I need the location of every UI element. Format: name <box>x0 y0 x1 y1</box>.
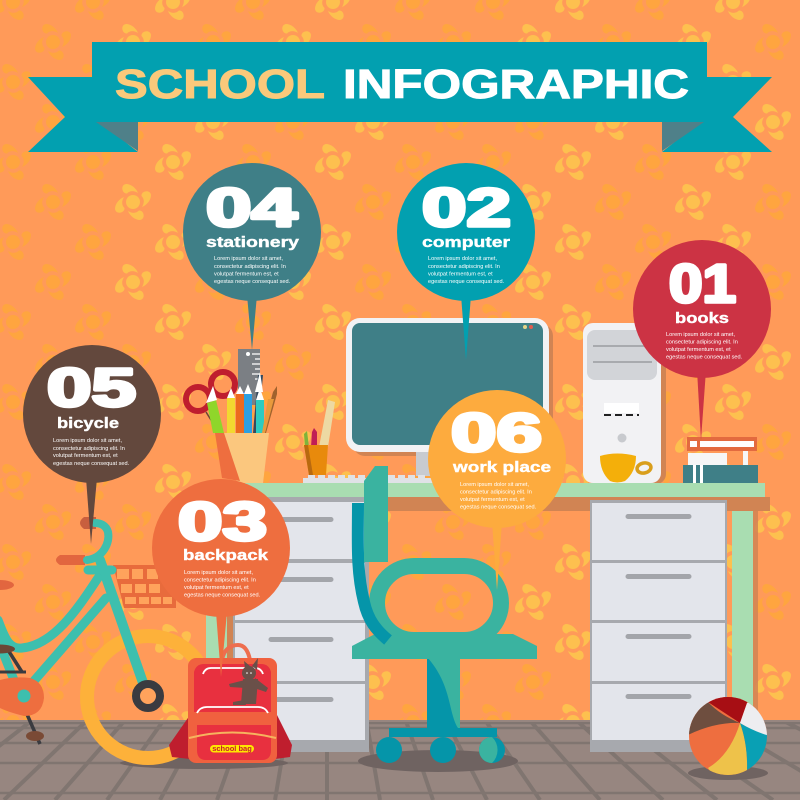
bicycle hub <box>136 684 160 708</box>
bubble 03 backpack: backpack <box>183 547 269 564</box>
bubble 01 books: books <box>675 310 729 327</box>
bubble 03 backpack <box>152 433 290 677</box>
bubble 01 books: 01 <box>669 254 736 314</box>
bubble 06 work place: Lorem ipsum dolor sit amet, <box>460 482 529 488</box>
bubble 04 stationery: stationery <box>206 234 300 251</box>
floor shadows <box>120 750 768 780</box>
desk <box>206 483 770 722</box>
title text <box>115 61 689 107</box>
title text: SCHOOL <box>115 61 325 107</box>
bubble 06 work place: egestas neque consequat sed. <box>460 504 537 510</box>
bubble 06 work place: consectetur adipiscing elit. In <box>460 490 532 496</box>
right drawer cabinet <box>590 500 727 752</box>
bubble 02 computer: Lorem ipsum dolor sit amet, <box>428 256 497 262</box>
bubble 01 books <box>633 240 771 440</box>
bubble 05 bicycle: egestas neque consequat sed. <box>53 461 130 467</box>
computer tower <box>583 323 666 484</box>
bubble 04 stationery: egestas neque consequat sed. <box>214 279 291 285</box>
bicycle kickstand and saddle <box>0 644 44 744</box>
bubble 06 work place <box>428 390 566 590</box>
chair backrest loop <box>377 566 501 640</box>
bubble 02 computer: 02 <box>422 178 511 238</box>
chair arm <box>358 503 388 640</box>
backpack <box>169 645 292 763</box>
bubble 02 computer: computer <box>422 234 510 251</box>
icon: coffee cup <box>600 454 652 482</box>
beach ball <box>689 697 767 775</box>
bubble 01 books: volutpat fermentum est, et <box>666 347 731 353</box>
ribbon left tail <box>28 77 138 152</box>
bubble 05 bicycle: bicycle <box>57 415 119 432</box>
bubble 02 computer: consectetur adipiscing elit. In <box>428 264 500 270</box>
scissors <box>186 372 235 428</box>
floor <box>0 720 800 800</box>
bubble 03 backpack: Lorem ipsum dolor sit amet, <box>184 570 253 576</box>
bubble 05 bicycle: consectetur adipiscing elit. In <box>53 446 125 452</box>
bubble 04 stationery: consectetur adipiscing elit. In <box>214 264 286 270</box>
chair seat <box>352 634 537 659</box>
bicycle frame <box>0 523 148 700</box>
bubble 06 work place: work place <box>452 459 551 476</box>
bubble 03 backpack: volutpat fermentum est, et <box>184 585 249 591</box>
bubble 04 stationery: volutpat fermentum est, et <box>214 272 279 278</box>
bubble 01 books: consectetur adipiscing elit. In <box>666 340 738 346</box>
ribbon right fold <box>662 122 704 151</box>
small orange cup with pens <box>304 400 335 475</box>
bubble 03 backpack: egestas neque consequat sed. <box>184 592 261 598</box>
chair base and wheels <box>376 655 505 763</box>
bicycle handlebar grips <box>0 517 96 590</box>
peach cup <box>224 433 269 483</box>
monitor <box>346 318 553 476</box>
ribbon left fold <box>96 122 138 151</box>
ribbon right tail <box>662 77 772 152</box>
pencil holder with stationery <box>186 349 277 483</box>
teddy toy <box>229 658 268 705</box>
ribbon body <box>92 42 707 122</box>
bicycle wheel <box>87 636 209 758</box>
bubble 02 computer: egestas neque consequat sed. <box>428 279 505 285</box>
bubble 04 stationery: 04 <box>206 178 297 238</box>
ruler <box>238 349 260 405</box>
backpack body <box>188 658 277 763</box>
bubble 01 books: egestas neque consequat sed. <box>666 354 743 360</box>
bubble 05 bicycle: Lorem ipsum dolor sit amet, <box>53 438 122 444</box>
left drawer cabinet <box>233 497 369 752</box>
bubble 05 bicycle <box>23 345 161 544</box>
pencils <box>206 372 277 433</box>
bicycle basket <box>113 565 176 608</box>
bicycle <box>0 517 209 758</box>
title banner <box>28 42 772 152</box>
office chair <box>352 466 537 763</box>
bubble 03 backpack: 03 <box>178 492 267 552</box>
bubble 02 computer: volutpat fermentum est, et <box>428 272 493 278</box>
stack of books <box>683 437 758 483</box>
bubble 02 computer <box>397 163 535 360</box>
backpack label: school bag <box>212 744 252 753</box>
bubble 05 bicycle: volutpat fermentum est, et <box>53 453 118 459</box>
bubble 06 work place: volutpat fermentum est, et <box>460 497 525 503</box>
bicycle chain guard <box>0 677 44 716</box>
backpack straps <box>169 715 292 759</box>
bubble 01 books: Lorem ipsum dolor sit amet, <box>666 332 735 338</box>
bubble 03 backpack: consectetur adipiscing elit. In <box>184 578 256 584</box>
bubble 06 work place: 06 <box>451 403 542 463</box>
bubble 05 bicycle: 05 <box>47 358 136 418</box>
backpack handle <box>222 645 250 660</box>
keyboard <box>303 475 433 484</box>
bubble 04 stationery: Lorem ipsum dolor sit amet, <box>214 256 283 262</box>
bubble 04 stationery <box>183 163 321 350</box>
title text: INFOGRAPHIC <box>343 61 689 107</box>
